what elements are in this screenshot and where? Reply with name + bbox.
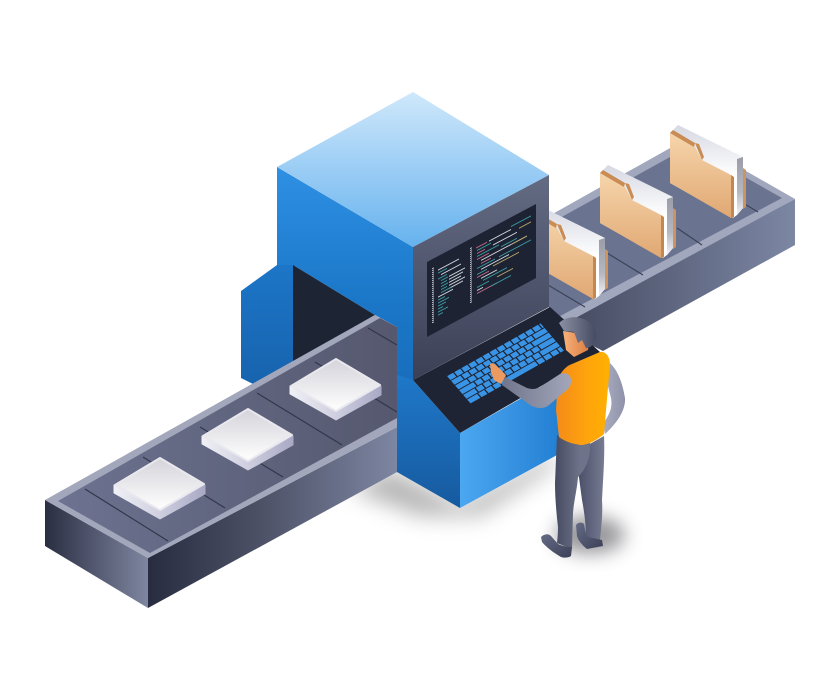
near arm <box>502 373 571 408</box>
person <box>490 317 625 558</box>
conveyor end wall <box>45 500 148 608</box>
code lines <box>433 216 531 323</box>
right shoe <box>576 523 603 549</box>
conveyor rail <box>549 138 795 322</box>
belt seams <box>548 203 758 307</box>
folder far <box>670 125 746 218</box>
person ground shadow <box>555 516 625 554</box>
hair <box>559 317 596 348</box>
tunnel opening <box>293 265 375 362</box>
box 2 <box>202 409 293 470</box>
neck and face <box>563 331 590 357</box>
control panel <box>413 175 549 380</box>
machine lower left column <box>397 375 460 508</box>
folder middle <box>600 165 676 258</box>
conveyor rail <box>45 315 397 558</box>
machine left face <box>277 167 413 385</box>
hand <box>490 363 506 384</box>
left leg <box>555 435 590 549</box>
machine rear wing <box>241 265 295 384</box>
machine top <box>277 92 549 247</box>
keyboard shelf <box>413 307 600 433</box>
left shoe <box>541 534 572 558</box>
keyboard <box>449 325 562 401</box>
conveyor side wall <box>148 427 397 608</box>
screen <box>427 204 536 337</box>
right conveyor <box>548 138 795 351</box>
machine lower front face <box>460 365 580 508</box>
folder near <box>532 206 608 299</box>
conveyor belt <box>58 318 397 553</box>
left conveyor <box>45 315 397 608</box>
box 1 <box>114 458 205 519</box>
conveyor side wall <box>565 199 795 351</box>
far arm <box>603 360 625 434</box>
vest <box>556 352 610 445</box>
machine ground shadow <box>350 452 557 516</box>
box 3 <box>290 359 381 420</box>
belt seams <box>85 328 397 541</box>
conveyor belt <box>549 146 782 322</box>
right leg <box>578 436 604 540</box>
